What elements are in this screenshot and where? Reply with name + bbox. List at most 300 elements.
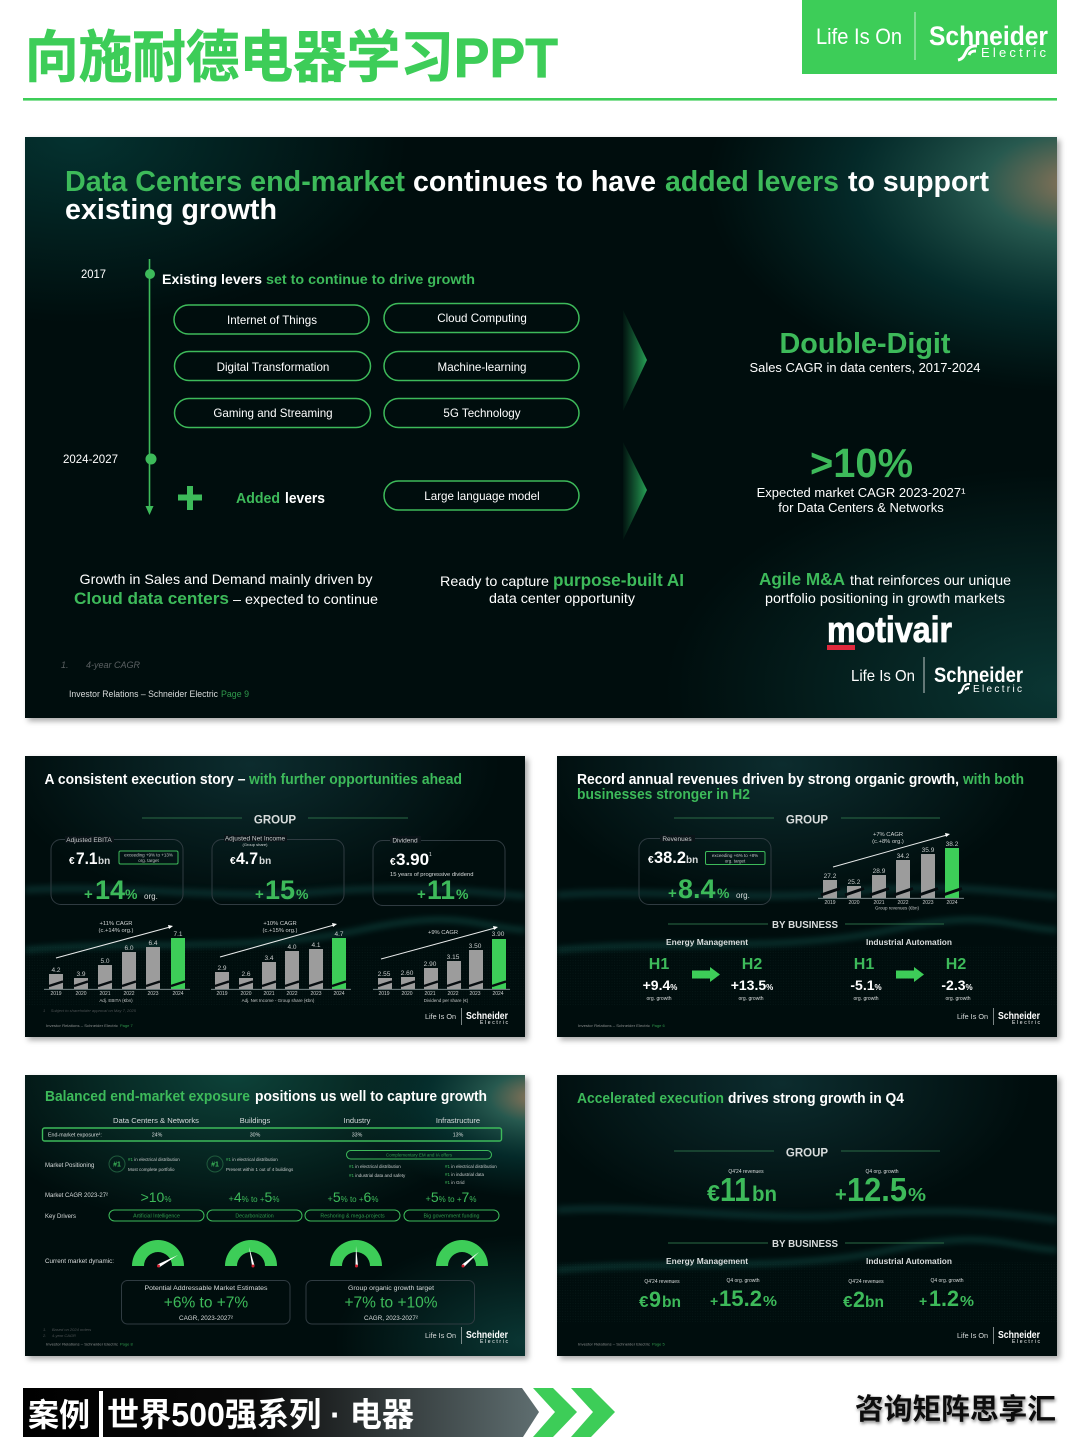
footer: Page 7 <box>120 1023 133 1028</box>
stat: double digit <box>750 328 980 375</box>
industrial automation metrics: Q4'24 revenues <box>848 1279 884 1285</box>
existing levers heading: set to continue to drive growth <box>266 271 475 287</box>
key drivers row: Reshoring & mega-projects <box>320 1214 385 1220</box>
card: adjusted EBITA: org. <box>144 892 158 901</box>
industrial automation metrics: -5.1% <box>850 977 882 993</box>
arrow: chevron one <box>623 310 647 411</box>
logo: Schneider Electric: Life Is On <box>425 1012 456 1021</box>
text block: cloud data centers: – expected to continue <box>233 591 378 607</box>
bar chart: dividend: 2023 <box>469 991 481 997</box>
timeline with arrow: 2024-2027 <box>63 452 118 466</box>
text block: cloud data centers: Growth in Sales and Demand mainly driven by <box>80 571 372 587</box>
energy management metrics: % <box>763 1294 777 1310</box>
lever pills: Internet of Things <box>227 314 317 327</box>
card: adjusted net income: + <box>255 886 264 903</box>
gauge: data centers <box>132 1240 184 1268</box>
market positioning row: #1 industrial data and safety <box>349 1173 406 1178</box>
added levers label <box>236 491 325 507</box>
market positioning row: #1 in Grid <box>445 1180 465 1185</box>
bar chart: dividend: 2.60 <box>401 970 414 977</box>
industrial automation metrics: Industrial Automation <box>866 937 952 947</box>
stat: Q4 organic growth: Q4 org. growth <box>865 1169 899 1175</box>
bar chart: adjusted EBITA <box>44 921 190 1003</box>
energy management metrics: org. growth <box>646 996 672 1002</box>
card: dividend: Dividend <box>392 838 418 844</box>
added levers label: levers <box>285 491 325 507</box>
box: group organic growth target <box>306 1280 474 1324</box>
market positioning row: #1 in electrical distribution <box>445 1164 497 1169</box>
bar chart: dividend: 2024 <box>492 991 504 997</box>
main slide heading: to support <box>848 166 989 198</box>
energy management metrics: + <box>710 1293 718 1309</box>
bar chart: dividend: 2020 <box>401 991 413 997</box>
industrial automation metrics: 2 <box>853 1287 865 1312</box>
logo: Schneider Electric: Schneider <box>466 1330 508 1341</box>
arrow: H1 to H2 <box>692 967 720 982</box>
bar chart: adjusted net income: 2024 <box>333 991 345 997</box>
text block: agile M&A: Agile M&A <box>759 569 845 589</box>
arrow: chevron two <box>623 442 647 540</box>
card: adjusted net income: € <box>230 856 236 867</box>
industrial automation metrics: + <box>919 1293 927 1309</box>
card: dividend <box>373 836 505 906</box>
text block: purpose-built AI: Ready to capture <box>440 573 549 589</box>
bar chart: group revenues: 34.2 <box>897 853 910 860</box>
bar chart: adjusted net income: 2.9 <box>217 965 227 972</box>
industrial automation metrics <box>850 937 973 1002</box>
card: revenues: 38.2 <box>654 848 686 867</box>
bar chart: adjusted net income: 4.1 <box>311 942 321 949</box>
key drivers row: Key Drivers <box>45 1214 76 1220</box>
text block: agile M&A: that reinforces our unique <box>850 572 1011 588</box>
footer: Investor Relations – Schneider Electric <box>578 1023 650 1028</box>
bar chart: dividend: Dividend per share (€) <box>424 998 469 1003</box>
footnotes: 2. 4-year CAGR <box>42 1333 76 1338</box>
logo: Schneider Electric: Schneider <box>998 1011 1040 1022</box>
gauge: infrastructure <box>436 1240 488 1268</box>
icon: plus <box>178 486 202 510</box>
text block: purpose-built AI <box>440 570 684 606</box>
logo: Schneider Electric: Life Is On <box>957 1012 988 1021</box>
footnotes: 1. Based on 2024 orders <box>43 1327 91 1332</box>
logo: Schneider Electric: Electric <box>973 684 1022 695</box>
card: adjusted net income: (Group share) <box>243 842 268 847</box>
bar chart: adjusted EBITA: 2020 <box>75 991 87 997</box>
bar chart: dividend: 2.55 <box>378 971 391 978</box>
footer banner <box>23 1388 539 1437</box>
logo: motivair: motivair <box>827 609 952 650</box>
bar chart: adjusted net income: 2.6 <box>241 971 251 978</box>
text block: agile M&A: portfolio positioning in growth markets <box>765 590 1005 606</box>
bar chart: dividend: 2.90 <box>424 961 437 968</box>
bar chart: dividend: 2021 <box>424 991 436 997</box>
bar chart: adjusted net income: 4.7 <box>334 931 344 938</box>
stat: double digit: Double-Digit <box>780 328 951 360</box>
box: potential addressable market: +6% to +7% <box>164 1294 248 1312</box>
bar chart: group revenues: 35.9 <box>922 847 935 854</box>
energy management metrics: H1 <box>649 956 669 973</box>
bar chart: dividend: 3.50 <box>469 943 482 950</box>
market CAGR row: >10% <box>141 1189 171 1205</box>
box: group organic growth target: +7% to +10% <box>344 1294 438 1312</box>
card: adjusted net income: 15 <box>265 875 295 905</box>
arrow: double chevron <box>533 1388 615 1437</box>
gauge: buildings <box>225 1240 277 1268</box>
main slide heading: Data Centers end-market <box>65 166 405 198</box>
bar chart: adjusted EBITA: 2019 <box>50 991 62 997</box>
slide heading: businesses stronger in H2 <box>577 787 750 803</box>
card: adjusted net income <box>212 835 344 905</box>
section heading: by business: BY BUSINESS <box>772 920 838 931</box>
slide heading <box>44 772 462 788</box>
lever pills: Cloud Computing <box>437 312 527 325</box>
box: potential addressable market <box>122 1280 290 1324</box>
logo: Schneider Electric: Life Is On <box>957 1331 988 1340</box>
end-market exposure row: 30% <box>250 1132 261 1138</box>
panel: record annual revenues slide <box>557 756 1057 1037</box>
slide heading <box>45 1089 487 1105</box>
stat: greater than ten percent: Expected market CAGR 2023-2027¹ <box>757 485 966 500</box>
energy management metrics: Energy Management <box>666 937 748 947</box>
existing levers heading: Existing levers <box>162 271 262 287</box>
main slide heading: added levers <box>665 166 839 198</box>
card: dividend: 15 years of progressive dividend <box>390 872 473 878</box>
bar chart: adjusted EBITA: 2021 <box>99 991 111 997</box>
lever pills: Large language model <box>424 490 540 503</box>
bar chart: adjusted EBITA: 7.1 <box>173 931 183 938</box>
stat: Q4 revenues: € <box>707 1180 720 1206</box>
bar chart: adjusted net income: 2021 <box>263 991 275 997</box>
footer: Page 6 <box>652 1023 665 1028</box>
lever pills: 5G Technology <box>443 407 521 420</box>
slide heading: Accelerated execution <box>577 1091 724 1107</box>
market CAGR row: +5% to +6% <box>328 1189 378 1205</box>
card: adjusted EBITA <box>51 836 183 905</box>
bar chart: dividend: 2022 <box>447 991 459 997</box>
stat: Q4 revenues: bn <box>752 1183 777 1206</box>
stat: greater than ten percent <box>757 440 966 515</box>
bar chart: group revenues: Group revenues (€bn) <box>875 906 920 910</box>
section heading: group: GROUP <box>786 1148 828 1160</box>
timeline with arrow <box>63 259 156 515</box>
slide heading: with further opportunities ahead <box>248 772 462 788</box>
panel: balanced end-market exposure slide <box>25 1075 525 1356</box>
end-market exposure row: 24% <box>152 1132 163 1138</box>
end-market exposure row: End-market exposure¹: <box>48 1132 102 1138</box>
card: adjusted net income: 4.7 <box>236 849 258 868</box>
lever pills <box>174 304 579 510</box>
bar chart: adjusted EBITA: +11% CAGR <box>100 921 132 927</box>
lever pills: Machine-learning <box>438 361 526 374</box>
card: adjusted net income: bn <box>259 856 271 867</box>
card: dividend: 1 <box>429 852 432 858</box>
market positioning row: #1 in electrical distribution <box>226 1157 278 1162</box>
market positioning row <box>45 1150 497 1185</box>
bar chart: dividend: 3.15 <box>447 954 460 961</box>
main slide heading <box>65 166 989 226</box>
market positioning row: #1 in electrical distribution <box>128 1157 180 1162</box>
bar chart: group revenues: 2019 <box>824 900 836 906</box>
stat: double digit: Sales CAGR in data centers, 2017-2024 <box>750 360 980 375</box>
card: adjusted net income: Adjusted Net Income <box>225 836 286 842</box>
arrow: H1 to H2 <box>896 967 924 982</box>
energy management metrics: € <box>639 1294 649 1311</box>
card: adjusted EBITA: bn <box>98 856 110 867</box>
bar chart: adjusted EBITA: 5.0 <box>100 958 110 965</box>
energy management metrics <box>639 1256 777 1312</box>
card: dividend: % <box>456 886 469 902</box>
existing levers heading <box>162 271 475 287</box>
card: revenues: 8.4 <box>678 874 716 904</box>
header divider line <box>23 98 1057 101</box>
stat: Q4 revenues: Q4'24 revenues <box>728 1169 764 1175</box>
logo: Schneider Electric <box>425 1008 508 1026</box>
card: adjusted EBITA: % <box>125 886 138 902</box>
key drivers row: Decarbonization <box>235 1214 274 1220</box>
footnote: 1. 4-year CAGR <box>61 660 141 670</box>
text block: purpose-built AI: data center opportunity <box>489 590 635 606</box>
logo: Schneider Electric: Electric <box>1012 1020 1040 1026</box>
column headings: Buildings <box>240 1116 270 1125</box>
slide heading: A consistent execution story – <box>44 772 246 788</box>
footer banner: 案例 <box>28 1397 90 1433</box>
energy management metrics: 15.2 <box>719 1286 762 1311</box>
slide heading: Balanced end-market exposure <box>45 1089 250 1105</box>
footnotes <box>42 1327 91 1338</box>
market positioning row: #1 in electrical distribution <box>349 1164 401 1169</box>
bar chart: group revenues: (c.+8% org.) <box>872 839 904 845</box>
bar chart: adjusted EBITA: 6.0 <box>124 945 134 952</box>
timeline with arrow: 2017 <box>81 267 106 281</box>
footer: Page 5 <box>652 1342 665 1346</box>
industrial automation metrics <box>843 1256 974 1312</box>
slide heading: Record annual revenues driven by strong organic growth, <box>577 772 959 788</box>
industrial automation metrics: Industrial Automation <box>866 1256 952 1266</box>
logo: Schneider Electric: Life Is On <box>851 668 915 685</box>
energy management metrics: +9.4% <box>643 977 677 993</box>
bar chart: adjusted EBITA: 2022 <box>123 991 135 997</box>
bar chart: adjusted net income: 2022 <box>286 991 298 997</box>
energy management metrics: org. growth <box>738 996 764 1002</box>
card: dividend: 11 <box>427 875 455 905</box>
bar chart: group revenues: 38.2 <box>946 841 959 848</box>
bar chart: group revenues: 25.2 <box>848 879 861 886</box>
key drivers row: Big government funding <box>424 1214 480 1220</box>
card: adjusted EBITA: 14 <box>95 875 125 905</box>
card: revenues: € <box>648 855 654 866</box>
added levers label: Added <box>236 491 280 507</box>
logo badge: Life Is On Schneider Electric: Electric <box>981 45 1046 60</box>
bar chart: adjusted net income <box>211 921 351 1003</box>
market positioning row: #1 in industrial data <box>445 1172 485 1177</box>
bar chart: adjusted EBITA: 6.4 <box>148 940 158 947</box>
logo badge: Life Is On Schneider Electric: Life Is On <box>816 24 902 49</box>
bar chart: dividend: +9% CAGR <box>428 930 458 936</box>
footer: Page 8 <box>120 1342 133 1346</box>
card: dividend: € <box>390 857 396 868</box>
market CAGR row: +4% to +5% <box>229 1189 279 1205</box>
bar chart: adjusted net income: 2023 <box>310 991 322 997</box>
logo: Schneider Electric <box>851 657 1023 695</box>
logo: Schneider Electric: Electric <box>1012 1339 1040 1345</box>
key drivers row <box>45 1210 499 1221</box>
footer: Investor Relations – Schneider Electric <box>69 689 218 699</box>
text block: purpose-built AI: purpose-built AI <box>553 570 684 590</box>
stat: greater than ten percent: for Data Centers & Networks <box>778 500 944 515</box>
bar chart: group revenues <box>818 832 964 910</box>
main slide heading: existing growth <box>65 194 277 226</box>
logo: Schneider Electric: Life Is On <box>425 1331 456 1340</box>
stat: greater than ten percent: >10% <box>810 440 913 486</box>
slide heading: with both <box>962 772 1024 788</box>
end-market exposure row <box>42 1128 502 1141</box>
energy management metrics: 9 <box>649 1287 661 1312</box>
box: group organic growth target: Group organic growth target <box>348 1285 434 1292</box>
bar chart: adjusted net income: (c.+15% org.) <box>263 928 298 934</box>
card: revenues: % <box>717 885 730 901</box>
box: group organic growth target: CAGR, 2023-2027² <box>364 1315 418 1322</box>
logo: Schneider Electric: Schneider <box>466 1011 508 1022</box>
bar chart: adjusted EBITA: 2024 <box>172 991 184 997</box>
market positioning row: Complementary EM and IA offers <box>386 1153 453 1158</box>
page title: 向施耐德电器学习PPT <box>25 26 558 89</box>
card: adjusted EBITA: org. target <box>138 858 160 863</box>
footer: Investor Relations – Schneider Electric <box>46 1342 118 1346</box>
card: adjusted EBITA: exceeding +9% to +13% <box>124 852 173 858</box>
bar chart: adjusted net income: 3.4 <box>264 955 274 962</box>
key drivers row: Artificial Intelligence <box>133 1214 180 1220</box>
card: revenues: org. <box>736 891 750 900</box>
energy management metrics: Q4 org. growth <box>726 1278 760 1284</box>
panel: consistent execution story slide <box>25 756 525 1037</box>
industrial automation metrics: org. growth <box>945 996 971 1002</box>
logo: Schneider Electric <box>957 1327 1040 1345</box>
industrial automation metrics: % <box>960 1294 974 1310</box>
card: revenues: + <box>668 885 677 902</box>
text block: agile M&A <box>759 569 1011 606</box>
end-market exposure row: 33% <box>352 1132 363 1138</box>
energy management metrics <box>643 937 773 1002</box>
column headings: Data Centers & Networks <box>113 1116 199 1125</box>
market CAGR row <box>45 1189 476 1205</box>
card: revenues: Revenues <box>662 836 692 843</box>
footnote: 1 Subject to shareholder approval on May 7, 2025 <box>43 1008 137 1013</box>
logo: Schneider Electric: Electric <box>480 1339 508 1345</box>
gauge: industry <box>330 1240 382 1268</box>
slide heading <box>577 1091 904 1107</box>
bar chart: adjusted EBITA: 3.9 <box>76 971 86 978</box>
logo: Schneider Electric: Schneider <box>934 664 1023 687</box>
industrial automation metrics: € <box>843 1294 853 1311</box>
stat: Q4 organic growth: % <box>908 1185 926 1205</box>
stat: Q4 organic growth: + <box>835 1184 847 1206</box>
footer: Page 9 <box>221 689 249 699</box>
market positioning row: Present within 1 out of 4 buildings <box>226 1167 294 1172</box>
box: potential addressable market: Potential Addressable Market Estimates <box>144 1285 268 1292</box>
logo badge: Life Is On Schneider Electric <box>802 0 1057 74</box>
panel: data centers main slide <box>25 137 1057 718</box>
bar chart: group revenues: 2022 <box>897 900 909 906</box>
industrial automation metrics: org. growth <box>853 996 879 1002</box>
end-market exposure row: 13% <box>453 1132 464 1138</box>
energy management metrics: H2 <box>742 956 762 973</box>
text block: cloud data centers: Cloud data centers <box>74 589 229 608</box>
bar chart: adjusted net income: 2019 <box>216 991 228 997</box>
bar chart: adjusted net income: 2020 <box>240 991 252 997</box>
bar chart: adjusted net income: 4.0 <box>287 944 297 951</box>
slide heading: positions us well to capture growth <box>255 1089 487 1105</box>
bar chart: dividend <box>373 926 510 1003</box>
stat: Q4 organic growth <box>835 1169 926 1208</box>
bar chart: group revenues: 2024 <box>946 900 958 906</box>
footer: Investor Relations – Schneider Electric <box>46 1023 118 1028</box>
bar chart: adjusted net income: Adj. Net Income - Group share (€bn) <box>242 998 315 1003</box>
market positioning row: Market Positioning <box>45 1163 94 1169</box>
stat: Q4 revenues <box>707 1169 777 1208</box>
column headings <box>113 1116 480 1125</box>
market CAGR row: Market CAGR 2023-27² <box>45 1193 108 1199</box>
footer banner: 世界500强系列 · 电器 <box>107 1396 414 1433</box>
bar chart: adjusted EBITA: 2023 <box>147 991 159 997</box>
section heading: by business: BY BUSINESS <box>772 1239 838 1250</box>
industrial automation metrics: H2 <box>946 956 966 973</box>
bar chart: group revenues: 2023 <box>922 900 934 906</box>
current market dynamic label: Current market dynamic: <box>45 1259 114 1265</box>
energy management metrics: Energy Management <box>666 1256 748 1266</box>
bar chart: dividend: 3.90 <box>492 931 505 938</box>
logo: Schneider Electric: Schneider <box>998 1330 1040 1341</box>
logo: Schneider Electric: Electric <box>480 1020 508 1026</box>
bar chart: group revenues: +7% CAGR <box>873 832 903 838</box>
card: revenues: exceeding +6% to +8% <box>712 853 758 858</box>
bar chart: group revenues: 2020 <box>848 900 860 906</box>
bar chart: group revenues: 27.2 <box>824 873 837 880</box>
logo: Schneider Electric <box>425 1327 508 1345</box>
footer: Investor Relations – Schneider Electric <box>578 1342 650 1346</box>
market positioning row: #1 <box>211 1162 219 1168</box>
lever pills: Digital Transformation <box>217 361 329 374</box>
card: adjusted EBITA: + <box>84 886 93 903</box>
industrial automation metrics: 1.2 <box>929 1286 959 1311</box>
logo badge: Life Is On Schneider Electric: Schneider <box>929 21 1048 51</box>
card: dividend: 3.90 <box>396 850 429 869</box>
market positioning row: #1 <box>113 1162 121 1168</box>
section heading: group: GROUP <box>254 814 296 826</box>
main slide heading: continues to have <box>413 166 656 198</box>
bar chart: adjusted EBITA: 4.2 <box>51 967 61 974</box>
bar chart: dividend: 2019 <box>378 991 390 997</box>
market CAGR row: +5% to +7% <box>426 1189 476 1205</box>
column headings: Infrastructure <box>436 1116 480 1125</box>
bar chart: group revenues: 28.9 <box>873 868 886 875</box>
bar chart: adjusted EBITA: Adj. EBITA (€bn) <box>99 998 133 1003</box>
section heading: group: GROUP <box>786 814 828 826</box>
slide heading: drives strong growth in Q4 <box>728 1091 904 1107</box>
card: adjusted EBITA: € <box>69 856 75 867</box>
energy management metrics: bn <box>662 1294 681 1311</box>
text block: cloud data centers <box>74 571 378 608</box>
industrial automation metrics: bn <box>865 1294 884 1311</box>
panel: accelerated execution slide <box>557 1075 1057 1356</box>
stat: Q4 revenues: 11 <box>720 1171 750 1208</box>
energy management metrics: Q4'24 revenues <box>644 1279 680 1285</box>
card: revenues: bn <box>686 855 698 866</box>
bar chart: adjusted EBITA: (c.+14% org.) <box>99 928 134 934</box>
bar chart: adjusted net income: +10% CAGR <box>263 921 297 927</box>
industrial automation metrics: Q4 org. growth <box>930 1278 964 1284</box>
industrial automation metrics: -2.3% <box>941 977 973 993</box>
market positioning row: Most complete portfolio <box>128 1167 175 1172</box>
